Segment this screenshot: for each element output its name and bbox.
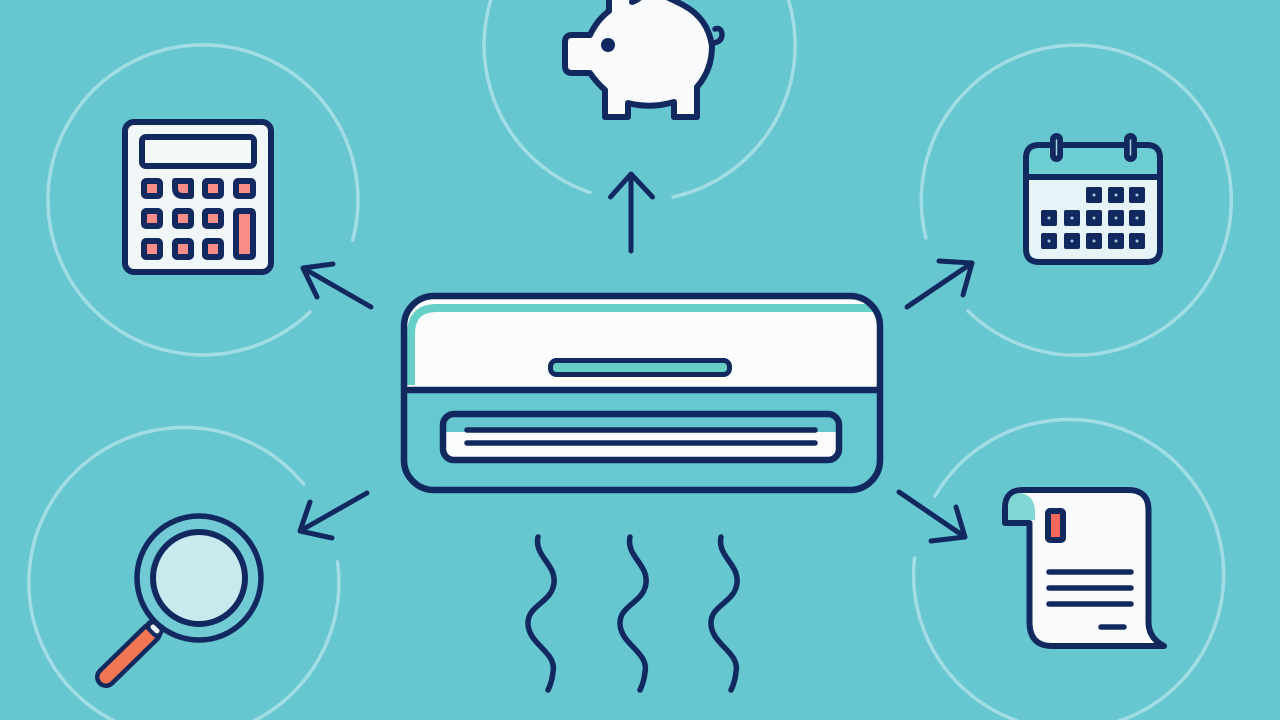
airflow waves bbox=[528, 537, 737, 690]
ring: piggy bank bbox=[484, 0, 795, 197]
icon: document bbox=[1005, 490, 1164, 646]
ring: magnifier bbox=[29, 428, 339, 720]
arrow: to magnifier bbox=[300, 493, 367, 538]
arrow: to document bbox=[899, 492, 965, 541]
icon: air conditioner bbox=[404, 296, 880, 490]
ring: calculator bbox=[48, 45, 358, 355]
ring: document bbox=[914, 420, 1224, 720]
arrow: to calendar bbox=[907, 261, 972, 307]
air vent bbox=[443, 414, 839, 460]
icon: piggy bank bbox=[565, 0, 722, 117]
arrow: up to piggy bank bbox=[610, 174, 652, 251]
icon: magnifier bbox=[106, 516, 261, 677]
arrow: to calculator bbox=[303, 264, 371, 307]
icon: calendar bbox=[1026, 133, 1160, 262]
ring: calendar bbox=[921, 45, 1231, 355]
display slot bbox=[550, 360, 730, 374]
icon: calculator bbox=[125, 122, 271, 272]
